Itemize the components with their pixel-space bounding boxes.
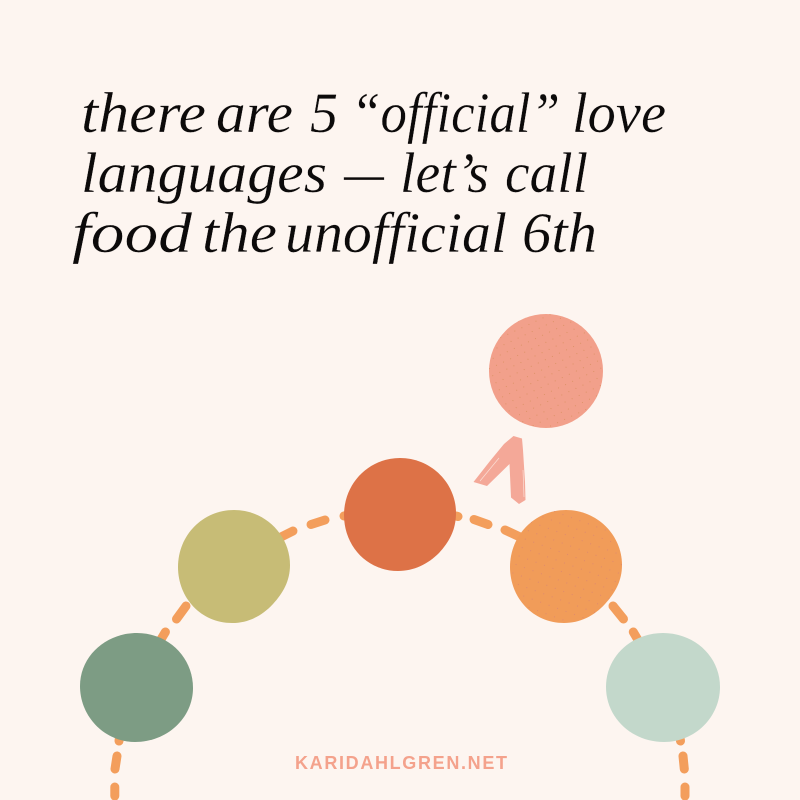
- title: languages: [81, 142, 327, 205]
- title: let’s: [400, 142, 489, 205]
- circle: olive: [178, 510, 290, 623]
- circle: pink: [489, 314, 603, 428]
- title: food: [72, 202, 193, 265]
- title: [72, 82, 666, 265]
- title: love: [572, 82, 666, 145]
- title: 5: [310, 82, 338, 145]
- title: call: [505, 142, 588, 205]
- title: are: [216, 82, 293, 145]
- footer url: KARIDAHLGREN.NET: [295, 753, 507, 773]
- title: unofficial: [285, 202, 507, 265]
- title: 6th: [522, 202, 597, 265]
- circle: green: [80, 633, 193, 742]
- title: the: [202, 202, 277, 265]
- title: —: [343, 142, 384, 205]
- title: there: [81, 82, 206, 145]
- circle: dark orange: [344, 458, 456, 571]
- circle: orange: [510, 510, 622, 623]
- dashed path connecting the circles: [115, 515, 685, 796]
- icon: brush arrow pointing to pink circle: [474, 436, 526, 504]
- circle: mint: [606, 633, 720, 742]
- title: “official”: [351, 82, 560, 145]
